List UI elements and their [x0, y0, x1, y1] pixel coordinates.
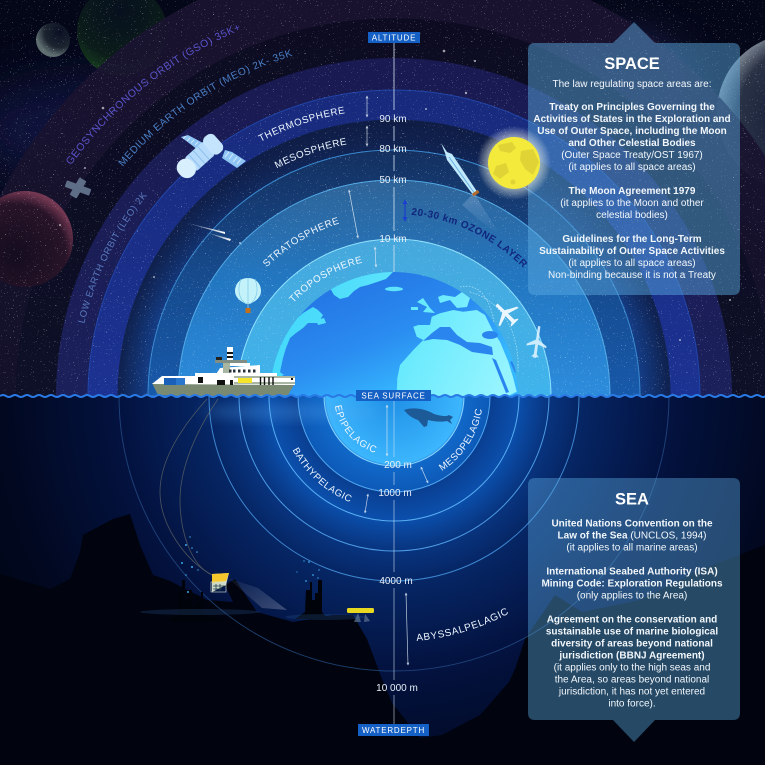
- text: unclos: [551, 518, 713, 554]
- text: moon agreement: (it applies to the Moon and other: [560, 198, 704, 209]
- text: long-term guidelines: [539, 234, 725, 281]
- text: outer space treaty: Use of Outer Space, including the Moon: [537, 126, 727, 137]
- text: isa mining code: (only applies to the Area): [577, 590, 687, 602]
- text: long-term guidelines: Guidelines for the Long-Term: [562, 234, 702, 245]
- seas: Mediterranean, Black Sea, Red Sea: [423, 327, 517, 393]
- icon: whale: [404, 408, 453, 427]
- planet: grey top right: [717, 34, 765, 190]
- icon: airplane 2: [525, 325, 549, 359]
- orbit labels: [66, 25, 292, 323]
- sea surface wave line: [0, 395, 360, 397]
- text: bbnj agreement: [546, 614, 718, 710]
- text: bbnj agreement: diversity of areas beyond national: [551, 638, 713, 650]
- label: mesopelagic: MESOPELAGIC: [438, 408, 482, 471]
- text: unclos: Law of the Sea (UNCLOS, 1994): [558, 530, 706, 542]
- label: abyssalpelagic: ABYSSALPELAGIC: [416, 608, 508, 641]
- tag: sea surface: SEA SURFACE: [361, 392, 426, 400]
- ship: [152, 347, 295, 396]
- orbit ring over seabed: [119, 396, 669, 671]
- label: 4000 m: 4000 m: [379, 576, 413, 587]
- ROV tether cables: [160, 399, 218, 575]
- atmosphere and orbit rings: [0, 0, 765, 396]
- text: moon agreement: [560, 186, 704, 221]
- text: bbnj agreement: jurisdiction, it has not yet entered: [558, 686, 705, 698]
- text: bbnj agreement: sustainable use of marine biological: [546, 626, 718, 638]
- planet: grey moon top left: [36, 23, 70, 57]
- land: continents: [268, 268, 517, 397]
- text: unclos: (it applies to all marine areas): [566, 542, 698, 554]
- surface glow: [200, 405, 380, 419]
- tag: altitude: ALTITUDE: [372, 34, 416, 42]
- text: intro: The law regulating space areas are:: [553, 79, 711, 90]
- tag: altitude: [368, 32, 420, 43]
- text: outer space treaty: [533, 102, 731, 173]
- vent particles left: [181, 536, 199, 593]
- tag: waterdepth: [358, 724, 429, 736]
- tag: waterdepth: WATERDEPTH: [362, 726, 425, 735]
- seabed silhouette: [0, 514, 765, 765]
- range arrows: [349, 96, 428, 665]
- icon: balloon: [235, 278, 261, 313]
- vent particles right: [296, 560, 320, 582]
- flight paths: [460, 286, 518, 372]
- text: outer space treaty: Treaty on Principles Governing the: [549, 102, 715, 113]
- hydrothermal vent right: [285, 580, 365, 620]
- label: 10 000 m: 10 000 m: [376, 683, 418, 694]
- label: ozone layer: 20-30 km OZONE LAYER: [412, 208, 527, 268]
- text: bbnj agreement: (it applies only to the high seas and: [554, 662, 710, 674]
- text: outer space treaty: (Outer Space Treaty/OST 1967): [561, 150, 703, 161]
- icon: airplane 1: [487, 295, 524, 332]
- text: moon agreement: celestial bodies): [596, 210, 668, 221]
- axis line: [393, 43, 395, 724]
- icon: space station satellite: [172, 131, 246, 183]
- altitude scale labels: [376, 114, 418, 694]
- planet: red: [0, 191, 73, 287]
- panel: space: [528, 22, 740, 295]
- label: 1000 m: 1000 m: [378, 488, 412, 499]
- text: isa mining code: International Seabed Authority (ISA): [546, 566, 718, 578]
- ROV light beam: [228, 578, 287, 610]
- text: long-term guidelines: Non-binding because it is not a Treaty: [548, 270, 716, 281]
- hydrothermal vent left: [140, 580, 260, 622]
- label: GSO: GEOSYNCHRONOUS ORBIT (GSO) 35K+: [66, 25, 240, 164]
- icon: small grey satellite: [62, 174, 94, 202]
- label: troposphere: TROPOSPHERE: [288, 256, 362, 302]
- label: stratosphere: STRATOSPHERE: [263, 217, 339, 266]
- ocean labels: [292, 405, 508, 641]
- label: epipelagic: EPIPELAGIC: [334, 405, 376, 452]
- text: bbnj agreement: into force).: [608, 698, 656, 710]
- ocean depth rings: [209, 396, 579, 581]
- icon: rocket: [441, 143, 500, 235]
- text: isa mining code: Mining Code: Exploration Regulations: [541, 578, 723, 590]
- starfield: [0, 0, 765, 396]
- label: 10 km: 10 km: [379, 234, 407, 245]
- icon: ROV yellow: [211, 573, 229, 592]
- text: outer space treaty: and Other Celestial Bodies: [568, 138, 696, 149]
- icon: AUV yellow with lights: [347, 608, 374, 622]
- label: MEO: MEDIUM EARTH ORBIT (MEO) 2K- 35K: [118, 49, 292, 166]
- heading: space: SPACE: [604, 55, 660, 73]
- text: bbnj agreement: Agreement on the conservation and: [547, 614, 717, 626]
- sea surface wave line right: [430, 395, 765, 397]
- label: 50 km: 50 km: [379, 175, 407, 186]
- earth globe: [268, 268, 518, 397]
- text: unclos: United Nations Convention on the: [551, 518, 713, 530]
- label: mesosphere: MESOSPHERE: [274, 138, 346, 168]
- text: moon agreement: The Moon Agreement 1979: [569, 186, 696, 197]
- atmosphere labels: [258, 106, 362, 302]
- text: long-term guidelines: Sustainability of Outer Space Activities: [539, 246, 725, 257]
- label: 80 km: 80 km: [379, 144, 407, 155]
- label: 90 km: 90 km: [379, 114, 407, 125]
- label: bathypelagic: BATHYPELAGIC: [292, 447, 352, 502]
- text: isa mining code: [541, 566, 723, 602]
- label: 200 m: 200 m: [384, 460, 412, 471]
- heading: sea: SEA: [615, 490, 649, 508]
- text: outer space treaty: Activities of States in the Exploration and: [533, 114, 731, 125]
- planet: green: [77, 0, 167, 76]
- ozone range arrow: [404, 200, 406, 221]
- text: bbnj agreement: the Area, so areas beyond national: [555, 674, 709, 686]
- panel: sea: [528, 478, 740, 742]
- text: outer space treaty: (it applies to all space areas): [568, 162, 696, 173]
- icon: shooting stars: [183, 222, 231, 241]
- text: bbnj agreement: jurisdiction (BBNJ Agreement): [558, 650, 705, 662]
- label: thermosphere: THERMOSPHERE: [258, 106, 345, 141]
- label: LEO: LOW EARTH ORBIT (LEO) 2K: [78, 192, 147, 323]
- text: long-term guidelines: (it applies to all space areas): [568, 258, 696, 269]
- icon: moon: [477, 126, 551, 200]
